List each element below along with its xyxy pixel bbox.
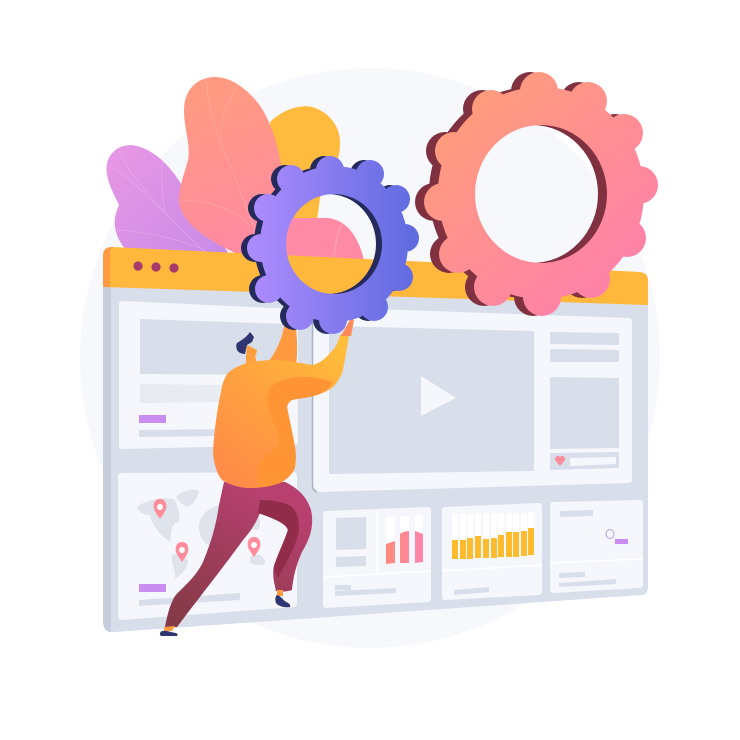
window control dots xyxy=(133,261,179,273)
background circle xyxy=(80,68,660,648)
gear face xyxy=(424,72,658,316)
panel: top left card xyxy=(122,304,295,446)
panel: video player card xyxy=(312,306,629,492)
shoe: back xyxy=(275,590,290,607)
small purple gear xyxy=(241,156,419,334)
shoe: front xyxy=(160,626,178,636)
gear face xyxy=(247,156,419,334)
window header bar xyxy=(103,247,648,305)
leaf: purple xyxy=(107,145,230,255)
sweater xyxy=(213,333,349,488)
icon: heart xyxy=(555,456,565,466)
sidebar list xyxy=(550,332,619,470)
icon: play button xyxy=(421,376,456,416)
person xyxy=(160,318,354,636)
chart columns xyxy=(386,515,423,564)
panel: status card xyxy=(551,503,643,590)
leaf: yellow xyxy=(270,106,340,220)
world map continents xyxy=(137,490,265,578)
map pins xyxy=(154,499,260,562)
neck and face xyxy=(246,345,257,366)
gear depth xyxy=(415,72,649,316)
panel: world map card xyxy=(121,475,294,617)
gear depth xyxy=(241,156,413,334)
plant leaves xyxy=(107,77,364,260)
hand xyxy=(341,318,354,336)
large pink gear xyxy=(415,72,658,316)
hair xyxy=(236,332,254,354)
leaf: salmon xyxy=(179,77,285,260)
browser window xyxy=(103,247,648,632)
chart columns xyxy=(452,512,534,559)
raised back arm xyxy=(268,322,297,366)
trousers xyxy=(165,482,312,627)
panel: yellow bar chart card xyxy=(442,506,542,597)
video area xyxy=(329,326,534,474)
leaf: pink small xyxy=(280,218,364,260)
trouser shadow xyxy=(258,500,299,578)
window body xyxy=(103,285,648,632)
sweater shadow xyxy=(257,377,333,487)
panel: small bar chart card xyxy=(324,510,431,605)
